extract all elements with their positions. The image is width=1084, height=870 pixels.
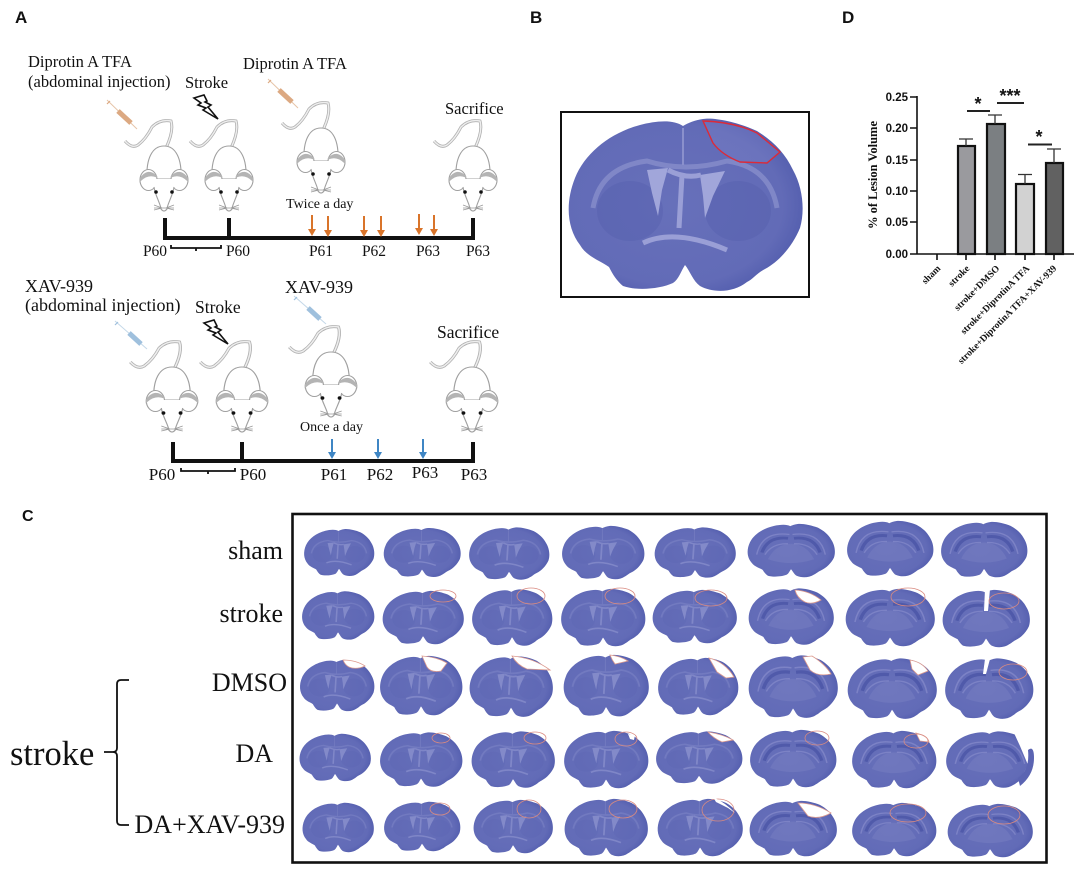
timeline day labels: P63 [461, 465, 487, 484]
x axis labels: stroke+DiprotinA TFA [959, 263, 1032, 337]
panel A: XAV-939 timeline [25, 276, 499, 484]
label: XAV-939 abdominal injection [25, 276, 180, 316]
row: stroke [302, 588, 1030, 647]
bar: stroke [958, 146, 975, 254]
frame [561, 112, 809, 297]
timeline day labels: P60 [240, 465, 266, 484]
y axis ticks and labels: 0.20 [886, 123, 908, 135]
frame [292, 514, 1046, 862]
label: sacrifice: Sacrifice [437, 322, 499, 342]
icon: lightning bolt [204, 320, 228, 344]
panel letter A: A [15, 8, 27, 27]
bars [958, 124, 1063, 254]
brace [104, 680, 129, 825]
brain section [569, 119, 803, 291]
panel letter C: C [22, 508, 34, 525]
icon: mouse treatment [289, 327, 357, 417]
label: Diprotin A TFA abdominal injection: Diprotin A TFA [28, 52, 132, 71]
icon: syringe [107, 100, 137, 129]
icon: lightning bolt [194, 95, 218, 119]
icon: syringe treatment [294, 296, 326, 324]
timeline day labels: P62 [362, 243, 386, 260]
label: DA: DA [235, 739, 273, 768]
label: stroke: Stroke [185, 73, 228, 92]
y axis ticks and labels [886, 92, 909, 261]
timeline axis [165, 218, 473, 238]
timeline day labels: P60 [143, 243, 167, 260]
bar: stroke+DiprotinA TFA+XAV-939 [1046, 163, 1063, 254]
label: XAV-939 treatment: XAV-939 [285, 277, 353, 297]
timeline day labels: P63 [466, 243, 490, 260]
significance stars: *** [999, 86, 1021, 106]
significance stars [974, 86, 1043, 147]
label: stroke: stroke [219, 599, 283, 628]
panel D: bar chart [866, 86, 1074, 366]
x axis labels: stroke+DiprotinA TFA+XAV-939 [956, 263, 1059, 366]
timeline day labels: P60 [149, 465, 175, 484]
row: DA [300, 730, 1040, 788]
timeline day labels: P63 [412, 463, 438, 482]
icon: syringe [115, 321, 147, 349]
axes [910, 96, 1074, 260]
significance bars [967, 103, 1052, 144]
timeline day labels: P60 [226, 243, 250, 260]
label: XAV-939 abdominal injection: (abdominal injection) [25, 295, 180, 316]
timeline day labels: P62 [367, 465, 393, 484]
y axis ticks and labels: 0.00 [886, 249, 908, 261]
timeline day labels: P61 [309, 243, 333, 260]
y axis title: % of Lesion Volume [866, 121, 880, 229]
row: sham [304, 521, 1027, 580]
panel A: Diprotin A TFA timeline [28, 52, 504, 260]
label: stroke group: stroke [10, 735, 94, 773]
label: Diprotin A TFA treatment: Diprotin A TFA [243, 54, 347, 73]
icon: mouse stroke [190, 121, 253, 211]
panel C: group labels [135, 536, 287, 839]
row: DA+XAV-939 [303, 797, 1033, 857]
icon: mouse sacrifice [430, 342, 498, 432]
label: sham: sham [228, 536, 283, 565]
x axis labels: stroke+DMSO [952, 263, 1002, 313]
bar: stroke+DMSO [987, 124, 1005, 254]
panel letter D: D [842, 8, 854, 27]
y axis ticks and labels: 0.25 [886, 92, 909, 104]
label: XAV-939 abdominal injection: XAV-939 [25, 276, 93, 296]
lesion outline [703, 121, 780, 163]
timeline day labels: P63 [416, 243, 440, 260]
x axis labels: stroke [946, 263, 973, 289]
label: once a day: Once a day [300, 420, 363, 435]
y axis ticks and labels: 0.05 [886, 217, 909, 229]
timeline axis [173, 442, 473, 461]
label: twice a day: Twice a day [286, 197, 353, 212]
significance stars: * [1035, 127, 1043, 147]
panel C: brain section grid [292, 514, 1046, 862]
row: DMSO [300, 655, 1033, 719]
label: sacrifice: Sacrifice [445, 99, 504, 118]
icon: mouse stroke [200, 342, 268, 432]
significance stars: * [974, 94, 982, 114]
icon: mouse sacrifice [434, 121, 497, 211]
bracket [181, 468, 235, 474]
blue treatment arrows [328, 439, 427, 459]
label: DA+XAV-939: DA+XAV-939 [135, 810, 285, 839]
icon: mouse before injection [130, 342, 198, 432]
label: Diprotin A TFA abdominal injection: (abdominal injection) [28, 72, 170, 91]
y axis ticks and labels: 0.15 [886, 155, 909, 167]
timeline day labels [143, 243, 490, 260]
bracket [171, 245, 221, 251]
timeline day labels: P61 [321, 465, 347, 484]
error bars [959, 115, 1061, 184]
y axis ticks and labels: 0.10 [886, 186, 908, 198]
label: stroke: Stroke [195, 297, 241, 317]
icon: mouse treatment [282, 103, 345, 193]
label: DMSO: DMSO [212, 668, 287, 697]
timeline day labels [149, 463, 487, 484]
panel letter B: B [530, 8, 542, 27]
x axis labels: sham [920, 263, 943, 287]
bar: stroke+DiprotinA TFA [1016, 184, 1034, 254]
icon: syringe treatment [268, 79, 298, 108]
panel B: brain section with lesion [561, 112, 809, 297]
icon: mouse before injection [125, 121, 188, 211]
label: Diprotin A TFA abdominal injection [28, 52, 170, 91]
orange treatment arrows [308, 214, 438, 237]
